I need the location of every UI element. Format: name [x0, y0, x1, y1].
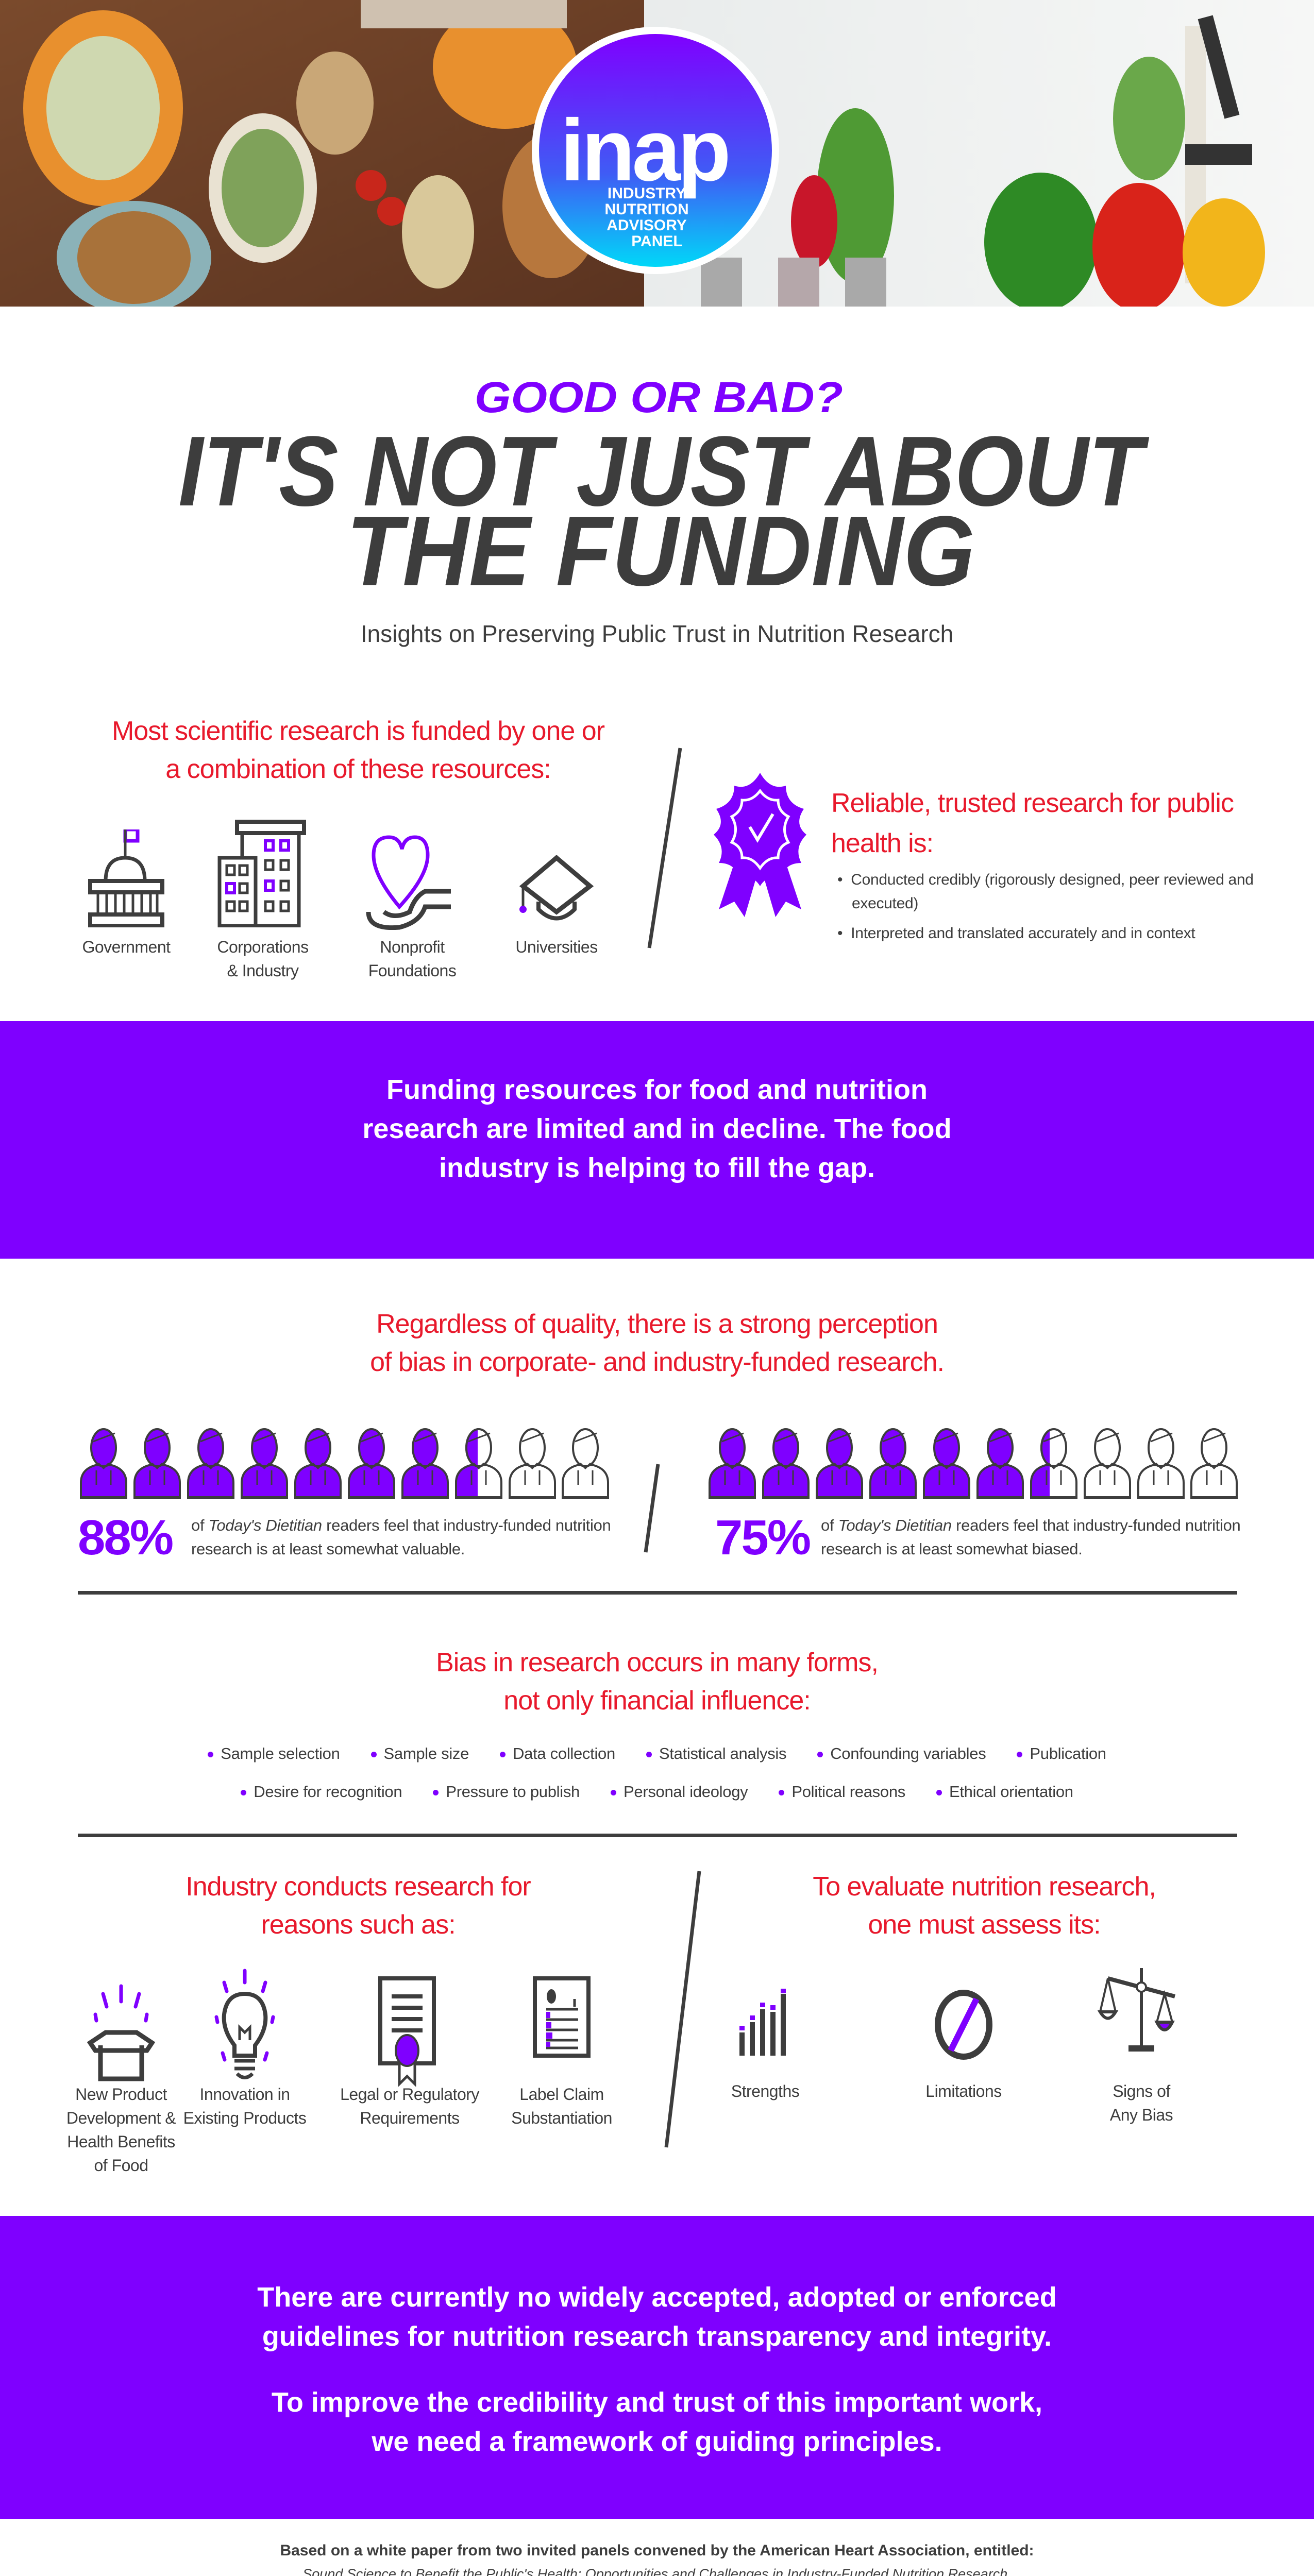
label: nonprofit: Nonprofit: [380, 938, 445, 956]
heading: perception of bias: [370, 1309, 944, 1377]
logo circle: NUTRITION: [604, 201, 689, 218]
heading: perception of bias: Regardless of quality, there is a strong perception: [376, 1309, 938, 1339]
heading: forms of bias: Bias in research occurs in many forms,: [436, 1648, 878, 1677]
icon: universities: [519, 855, 594, 920]
logo circle: PANEL: [631, 233, 683, 250]
heading: evaluate research: To evaluate nutrition research,: [813, 1872, 1156, 1902]
people chart: 75%: [709, 1428, 1238, 1499]
icon: rosette badge: [714, 773, 806, 917]
stat: 88%: of Today's Dietitian readers feel that industry-funded nutrition research is at least somewhat valuable.: [191, 1516, 611, 1558]
slash divider 1: [647, 748, 682, 948]
label: new product: of Food: [94, 2156, 148, 2175]
heading: industry reasons: [23, 1868, 693, 1944]
label: innovation: Existing Products: [183, 2109, 306, 2127]
label: nonprofit: Foundations: [368, 961, 456, 980]
bullet list: bias forms: Publication: [1030, 1744, 1106, 1762]
stat: 75%: [715, 1510, 1240, 1565]
purple band: funding limited: research are limited and in decline. The food: [362, 1113, 952, 1144]
bullet list: reliable criteria: • Interpreted and translated accurately and in context: [837, 925, 1195, 942]
title block: [178, 373, 1150, 647]
label: label claim: [500, 2082, 624, 2130]
heading: forms of bias: not only financial influence:: [503, 1686, 811, 1716]
heading: evaluate research: [701, 1868, 1268, 1944]
label: limitations: Limitations: [925, 2082, 1002, 2100]
icon: nonprofit heart hand: [366, 836, 451, 930]
title block: IT'S NOT JUST ABOUT: [178, 415, 1150, 527]
bullet list: bias forms: Sample selection: [221, 1744, 340, 1762]
label: new product: Health Benefits: [67, 2132, 175, 2151]
bullet list: bias forms: [0, 1741, 1314, 1804]
label: innovation: [183, 2082, 307, 2130]
bullet list: bias forms: Desire for recognition: [254, 1783, 402, 1801]
purple band: guidelines: guidelines for nutrition research transparency and integrity. To improve the credibility and trust of this important work,: [262, 2321, 1052, 2418]
label: legal: [335, 2082, 484, 2130]
bullet list: bias forms: Personal ideology: [624, 1783, 748, 1801]
heading: funding resources: [112, 716, 605, 784]
label: signs of bias: Signs of: [1113, 2082, 1170, 2100]
bullet list: bias forms: Ethical orientation: [949, 1783, 1073, 1801]
heading: reliable research: health is:: [831, 828, 933, 858]
purple band: funding limited: [0, 1021, 1314, 1259]
bullet list: bias forms: Data collection: [513, 1744, 615, 1762]
logo circle: ADVISORY: [607, 217, 687, 234]
label: label claim: Label Claim: [519, 2085, 604, 2104]
label: label claim: Substantiation: [511, 2109, 612, 2127]
bullet list: bias forms: Confounding variables: [830, 1744, 986, 1762]
icon: corporations: [217, 820, 306, 927]
icon: certificate: [376, 1976, 438, 2087]
label: legal: Legal or Regulatory: [340, 2085, 479, 2104]
icon: strengths bars: [734, 1989, 796, 2056]
stat: 88%: [78, 1510, 611, 1565]
label: corporations: Corporations: [217, 938, 309, 956]
bullet list: reliable criteria: • Conducted credibly (rigorously designed, peer reviewed and executed): [837, 871, 1254, 912]
label: signs of bias: [1085, 2079, 1198, 2127]
purple band: guidelines: we need a framework of guiding principles.: [372, 2426, 942, 2457]
header photo banner: [0, 0, 1314, 307]
slash divider 2: [644, 1464, 660, 1553]
purple band: guidelines: [0, 2216, 1314, 2519]
label: new product: [49, 2082, 193, 2177]
bullet list: bias forms: Sample size: [384, 1744, 469, 1762]
bullet list: bias forms: Statistical analysis: [659, 1744, 786, 1762]
icon: label claim: [531, 1976, 593, 2058]
heading: funding resources: a combination of these resources:: [165, 754, 551, 784]
title block: GOOD OR BAD?: [475, 373, 843, 421]
slash divider 3: [662, 1870, 703, 2148]
footer citation: [0, 2539, 1314, 2576]
label: new product: New Product: [75, 2085, 167, 2104]
stat: 88%: 88%: [78, 1510, 172, 1565]
purple band: funding limited: Funding resources for food and nutrition: [386, 1074, 928, 1105]
logo circle: inap: [560, 101, 728, 199]
heading: forms of bias: [436, 1648, 878, 1716]
label: universities: Universities: [515, 938, 598, 956]
icon: lightbulb: [211, 1968, 278, 2081]
icon: product box: [85, 1984, 157, 2081]
stat: 75%: of Today's Dietitian readers feel that industry-funded nutrition research is at least somewhat biased.: [821, 1516, 1240, 1558]
label: innovation: Innovation in: [200, 2085, 290, 2104]
label: nonprofit: [368, 938, 456, 980]
heading: reliable research: [831, 788, 1234, 858]
bullet list: bias forms: Pressure to publish: [446, 1783, 580, 1801]
purple band: guidelines: There are currently no widely accepted, adopted or enforced: [257, 2282, 1057, 2313]
footer citation: Based on a white paper from two invited panels convened by the American Heart Association, entitled:: [280, 2542, 1034, 2559]
purple band: funding limited: industry is helping to fill the gap.: [439, 1153, 875, 1183]
stat: 75%: 75%: [715, 1510, 810, 1565]
icon: government: [88, 829, 164, 927]
icon: limitations: [933, 1989, 995, 2061]
heading: funding resources: Most scientific research is funded by one or: [112, 716, 604, 746]
icon: scales: [1098, 1965, 1185, 2056]
heading: perception of bias: of bias in corporate- and industry-funded research.: [370, 1347, 944, 1377]
people chart: 88%: [80, 1428, 609, 1499]
bullet list: bias forms: Political reasons: [791, 1783, 905, 1801]
label: legal: Requirements: [360, 2109, 460, 2127]
heading: industry reasons: reasons such as:: [261, 1910, 456, 1940]
heading: industry reasons: Industry conducts research for: [186, 1872, 531, 1902]
heading: reliable research: Reliable, trusted research for public: [831, 788, 1234, 818]
label: new product: Development &: [66, 2109, 176, 2127]
label: corporations: [217, 938, 309, 980]
label: corporations: & Industry: [227, 961, 299, 980]
logo circle: [532, 27, 779, 274]
logo circle: INDUSTRY: [608, 185, 686, 202]
bullet list: reliable criteria: [837, 871, 1254, 942]
label: government: Government: [82, 938, 171, 956]
heading: evaluate research: one must assess its:: [868, 1910, 1101, 1940]
label: signs of bias: Any Bias: [1110, 2106, 1173, 2124]
title block: Insights on Preserving Public Trust in Nutrition Research: [361, 620, 953, 647]
label: strengths: Strengths: [731, 2082, 799, 2100]
title block: THE FUNDING: [346, 495, 975, 606]
